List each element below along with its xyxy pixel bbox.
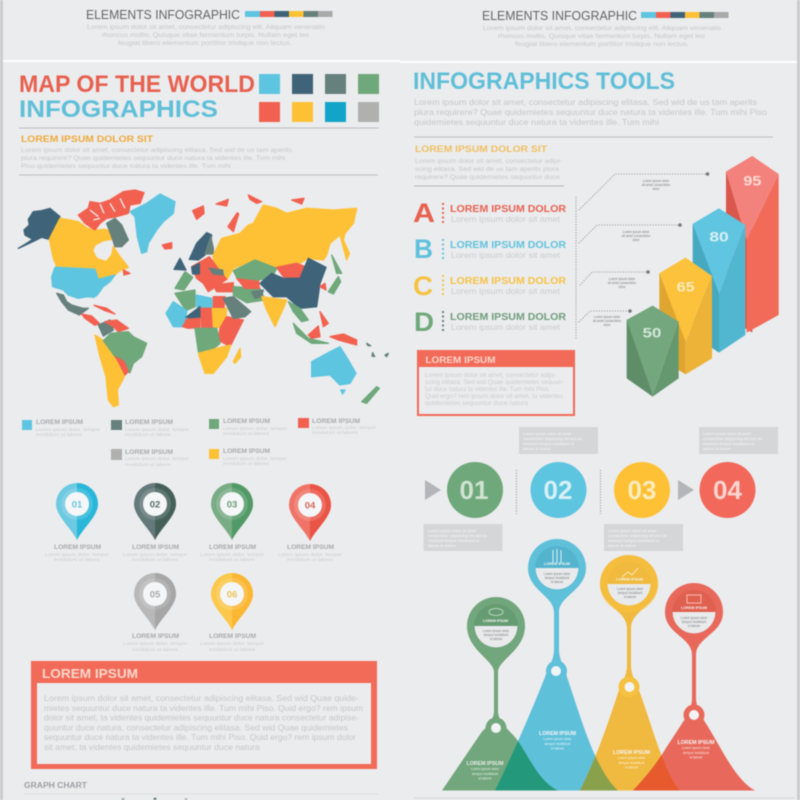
grey note 02 (519, 427, 598, 454)
pin captions: LOREM IPSUM (209, 544, 257, 551)
grey note 01: labore et dolore (428, 543, 457, 548)
colour swatches (259, 74, 379, 122)
funnel: green: tempor incididunt (484, 633, 508, 637)
funnel: green: ut labore (478, 776, 492, 780)
funnel: red: LOREM IPSUM (681, 606, 707, 610)
list item D: D (414, 307, 434, 337)
intro paragraph: tools (414, 97, 773, 138)
grey note 03 (604, 524, 683, 551)
intro text: map section: Lorem ipsum dolor sit amet, consectetur adipiscing elitasa. Sed wid de us tam aperits (21, 147, 293, 154)
callout box: lorem ipsum: mietes sequuntur duce natura ta videntes ille. Tum mihi Piso. Quid ergo? rem ipsum (44, 704, 363, 713)
funnel: blue: Lorem ipsum dolor (543, 737, 572, 741)
funnel: red (633, 583, 755, 790)
list item A (413, 198, 567, 228)
grey note 04: Lorem ipsum dolor sit amet (703, 431, 752, 436)
pin 01: 01 (72, 500, 83, 510)
pin 04: 04 (305, 500, 316, 512)
grey note 02: eiusmod tempor incididunt ut (523, 441, 575, 446)
header: left elements infographic (86, 7, 332, 47)
leader captions: dolor (632, 238, 640, 242)
subheading text: tools (414, 144, 564, 186)
step 01 (447, 462, 503, 518)
map legend: incididunt ut labore (125, 462, 171, 468)
map legend: Lorem ipsum dolor. tempor (223, 456, 287, 462)
bar: 50 (627, 306, 679, 397)
header: right elements infographic (482, 8, 728, 48)
graph chart heading: GRAPH CHART (24, 781, 87, 790)
pin captions: incididunt ut labore (209, 557, 255, 563)
list item B: Lorem ipsum dolor sit amet (451, 250, 561, 260)
title: map of the world infographics: MAP OF THE WORLD (19, 71, 255, 98)
pin captions (45, 544, 342, 653)
header: left elements infographic: rhoncus mollis. Quisque vitae fermentum turpis. Nullam eget leo (102, 32, 309, 39)
intro text: map section: LOREM IPSUM DOLOR SIT (21, 134, 153, 145)
funnel: yellow (580, 554, 662, 792)
pin 04 (289, 484, 331, 541)
funnel: yellow: LOREM IPSUM (613, 750, 650, 756)
header: right elements infographic: ELEMENTS INFOGRAPHIC (482, 8, 637, 23)
list item B (414, 234, 567, 264)
arrow: before 04 (678, 480, 694, 500)
map legend: Lorem ipsum dolor. tempor (312, 425, 376, 431)
grey note 04: consectetur adipiscing elit sed do (703, 436, 763, 441)
map legend: incididunt ut labore (312, 430, 358, 436)
leader captions: Lorem ipsum dolor (623, 230, 650, 234)
step 02: 02 (544, 475, 572, 505)
funnel: red: tempor incididunt (683, 751, 709, 755)
pin captions: incididunt ut labore (209, 647, 255, 653)
title: map of the world infographics (19, 71, 255, 123)
pin captions: incididunt ut labore (132, 557, 178, 563)
map legend: Lorem ipsum dolor. tempor (36, 427, 100, 433)
pin 06 (211, 573, 253, 630)
funnel: yellow: ut labore (624, 595, 636, 599)
callout box: tools: tur duce natura ta videntes ille. Tum mihi Piso. (425, 387, 550, 393)
funnel: red: ut labore (689, 756, 703, 760)
list item A: LOREM IPSUM DOLOR (450, 204, 567, 215)
list item B: LOREM IPSUM DOLOR (450, 240, 567, 251)
step circles 01-04 (425, 462, 756, 518)
pin captions: incididunt ut labore (132, 647, 178, 653)
funnel: green: tempor incididunt (472, 772, 498, 776)
pin 05 (134, 573, 176, 630)
pin captions: incididunt ut labore (54, 557, 100, 563)
arrow: before 01 (425, 480, 441, 500)
header: left elements infographic: Lorem ipsum dolor sit amet, consectetur adipiscing elit. Aliquam venenatis (87, 24, 326, 31)
map legend: Lorem ipsum dolor. tempor (125, 427, 189, 433)
pin 03: 03 (227, 500, 237, 510)
callout box: lorem ipsum: dolor sit amet, ta videntes quidemietes sequuntur duce natura consectetur adipise- (44, 714, 359, 722)
pin 02 (134, 483, 176, 540)
leader captions: dolor (618, 285, 626, 289)
list item C: Lorem ipsum dolor sit amet (451, 286, 561, 296)
header: right elements infographic: feugiat libero elementum porttitor tristique non lectus. (515, 41, 689, 48)
pin 03 (211, 483, 253, 540)
map legend: LOREM IPSUM (125, 449, 174, 456)
map legend: incididunt ut labore (223, 461, 269, 467)
list item B: B (414, 234, 433, 264)
step 04: 04 (713, 475, 742, 505)
map legend: incididunt ut labore (223, 431, 269, 437)
pin captions: Lorem ipsum dolor. tempor (200, 641, 264, 647)
callout box: lorem ipsum: LOREM IPSUM (42, 666, 138, 681)
funnel: yellow: LOREM IPSUM (616, 578, 643, 582)
leader captions: sit amet consectetur (642, 183, 671, 187)
bar: 80: 80 (709, 228, 729, 244)
funnel: green (442, 597, 558, 790)
intro paragraph: tools: plura requirere? Quae quidemietes sequuntur duce natura ta videntes ille. Tum mihi Piso (414, 107, 767, 117)
subheading text: tools: scing elitasa. Sed wid de us tam aperits plura (415, 166, 559, 173)
pin 01 (56, 483, 98, 540)
world map (18, 190, 388, 407)
callout box: tools: quidemietes sequuntur duce natura (425, 401, 529, 407)
pin 02: 02 (150, 500, 160, 510)
step 04 (700, 462, 756, 518)
grey note 01: consectetur adipiscing elit sed do (428, 533, 488, 538)
leader captions: dolor (603, 323, 611, 327)
leader captions: sit amet consectetur (608, 281, 637, 285)
callout box: tools: Lorem ipsum dolor sit amet, consectetur adipi- (425, 373, 556, 379)
list item A: A (413, 198, 435, 228)
leader captions: sit amet consectetur (622, 234, 651, 238)
map legend: LOREM IPSUM (36, 419, 84, 426)
funnel: red: Lorem ipsum dolor (682, 746, 711, 750)
map legend: LOREM IPSUM (223, 418, 271, 425)
map legend (22, 418, 376, 468)
callout box: tools (417, 350, 575, 416)
intro text: map section (19, 128, 379, 176)
pin captions: Lorem ipsum dolor. tempor (200, 552, 264, 558)
step 02 (530, 462, 586, 518)
pin 06: 06 (227, 590, 237, 600)
3d bar chart (627, 156, 779, 397)
funnel: yellow: ut labore (625, 766, 638, 770)
header: left elements infographic: ELEMENTS INFOGRAPHIC (86, 7, 240, 22)
funnel: green: Lorem ipsum dolor (483, 629, 510, 633)
funnel: green: LOREM IPSUM (466, 761, 504, 767)
grey note 03: labore et dolore (608, 543, 637, 548)
intro paragraph: tools: Lorem ipsum dolor sit amet, consectetur adipiscing elitasa. Sed wid de us tam aperits (414, 97, 757, 107)
funnel: blue: ut labore (551, 746, 564, 750)
grey note 04 (699, 427, 778, 454)
funnel: red: ut labore (688, 624, 700, 628)
grey note 04: eiusmod tempor incididunt ut (703, 441, 755, 446)
bar: 65: 65 (677, 279, 695, 295)
list item C (413, 271, 567, 301)
subheading text: tools: Lorem ipsum dolor sit amet, consectetur adipi- (415, 158, 562, 165)
pin 05: 05 (150, 590, 161, 600)
header: left elements infographic: feugiat libero elementum porttitor tristique non lectus. (118, 40, 292, 47)
step 03 (614, 462, 670, 518)
callout box: lorem ipsum: sit amet, ta videntes quidemietes sequuntur duce natura (44, 743, 261, 752)
list item D: Lorem ipsum dolor sit amet (451, 322, 561, 332)
pin captions: LOREM IPSUM (209, 633, 257, 640)
callout box: lorem ipsum: quuntur duce natura. consectetur adipiscing elitasa. Sed wid Quae quidemietes (44, 724, 348, 732)
list item D (414, 307, 567, 337)
grey note 03: consectetur adipiscing elit sed do (608, 533, 668, 538)
callout box: tools: scing elitasa. Sed wid Quae quidemietes sequun- (425, 380, 564, 386)
map legend: Lorem ipsum dolor. tempor (125, 456, 189, 462)
funnel: blue: tempor incididunt (545, 742, 570, 746)
list item A: Lorem ipsum dolor sit amet (451, 214, 561, 224)
pin captions: LOREM IPSUM (132, 633, 180, 640)
header: right elements infographic: Lorem ipsum dolor sit amet, consectetur adipiscing elit. Aliquam venenatis (483, 25, 722, 32)
callout box: lorem ipsum: sequuntur duce natura ta videntes ille. Tum mihi Piso. Quid ergo? rem ipsum dolor (44, 733, 356, 742)
funnel: red: LOREM IPSUM (678, 740, 714, 746)
funnel: red: Lorem ipsum dolor (681, 616, 708, 620)
map legend: incididunt ut labore (125, 432, 171, 438)
pin captions: Lorem ipsum dolor. tempor (123, 552, 187, 558)
pin captions: Lorem ipsum dolor. tempor (278, 552, 342, 558)
grey note 03: eiusmod tempor incididunt ut (608, 538, 660, 543)
funnel: yellow: tempor incididunt (618, 591, 642, 595)
subheading text: tools: LOREM IPSUM DOLOR SIT (415, 144, 547, 155)
funnel: green: LOREM IPSUM (483, 619, 508, 623)
leader captions: sit amet consectetur (593, 319, 622, 323)
funnel: green: ut labore (490, 637, 502, 641)
leader captions: dolor (652, 187, 660, 191)
leader captions: Lorem ipsum dolor (594, 315, 621, 319)
funnel: blue: tempor incididunt (545, 576, 569, 580)
leader captions (593, 179, 671, 327)
funnel: yellow: Lorem ipsum dolor (617, 756, 646, 760)
title: map of the world infographics: INFOGRAPHICS (19, 96, 218, 123)
title: infographics tools: INFOGRAPHICS TOOLS (413, 68, 675, 95)
list item C: LOREM IPSUM DOLOR (450, 276, 567, 287)
callout box: tools: LOREM IPSUM (426, 355, 496, 365)
graph chart heading (24, 781, 378, 800)
grey note 03: Lorem ipsum dolor sit amet (608, 528, 657, 533)
pin captions: LOREM IPSUM (132, 544, 180, 551)
funnel: green: Lorem ipsum dolor (471, 767, 500, 771)
bar: 50: 50 (643, 324, 662, 340)
funnel: blue (494, 538, 596, 792)
dotted leader lines (576, 172, 709, 340)
grey note 02: Lorem ipsum dolor sit amet (523, 431, 572, 436)
list item C: C (413, 271, 433, 301)
grey note 01: Lorem ipsum dolor sit amet (428, 528, 477, 533)
funnel: blue: LOREM IPSUM (544, 562, 570, 566)
intro text: map section: Piso quidemietes sequuntur duce natura ta videntes ille. Tum mihi (21, 163, 232, 170)
map legend: Lorem ipsum dolor. tempor (223, 426, 287, 432)
subheading text: tools: requirere? Quae quidemietes sequuntur duce (415, 174, 560, 181)
pin captions: Lorem ipsum dolor. tempor (123, 641, 187, 647)
map legend: LOREM IPSUM (125, 419, 174, 426)
bar: 65 (659, 258, 712, 374)
callout box: lorem ipsum: Lorem ipsum dolor sit amet, consectetur adipiscing elitasa. Sed wid Quae quide- (44, 694, 359, 703)
map legend: LOREM IPSUM (223, 448, 271, 455)
grey note 02: consectetur adipiscing elit sed do (523, 436, 583, 441)
map legend: incididunt ut labore (36, 432, 82, 438)
funnel: yellow: Lorem ipsum dolor (617, 587, 644, 591)
grey note 01 (424, 524, 502, 551)
pin captions: incididunt ut labore (287, 557, 333, 563)
callout box: lorem ipsum (31, 661, 377, 769)
bar: 95: 95 (743, 173, 762, 189)
leader captions: Lorem ipsum dolor (643, 179, 670, 183)
grey note 02: labore et dolore (523, 446, 552, 451)
funnel: blue: Lorem ipsum dolor (544, 572, 571, 576)
header: right elements infographic: rhoncus mollis. Quisque vitae fermentum turpis. Nullam eget leo (498, 33, 705, 40)
bar: 95 (726, 156, 779, 333)
grey note 01: eiusmod tempor incididunt ut (428, 538, 480, 543)
step 01: 01 (460, 475, 488, 505)
funnel: red: tempor incididunt (682, 620, 706, 624)
step 03: 03 (628, 475, 656, 505)
pin captions: LOREM IPSUM (287, 544, 335, 551)
pin captions: Lorem ipsum dolor. tempor (45, 552, 109, 558)
funnel: yellow: tempor incididunt (619, 761, 644, 765)
list item D: LOREM IPSUM DOLOR (450, 312, 567, 323)
grey note 04: labore et dolore (703, 446, 732, 451)
pin captions: LOREM IPSUM (54, 544, 102, 551)
funnel: blue: LOREM IPSUM (539, 731, 576, 737)
map legend: LOREM IPSUM (312, 418, 361, 425)
intro text: map section: plura requirere? Quae quidemietes sequuntur duce natura ta videntes ille. Tum mihi (21, 155, 286, 162)
intro paragraph: tools: quidemietes sequuntur duce natura ta videntes ille. Tum mihi (414, 117, 659, 127)
callout box: tools: Quid ergo? rem ipsum dolor sit amet, ta videntes (425, 394, 563, 400)
bar: 80 (693, 208, 745, 353)
funnel: blue: ut labore (551, 580, 563, 584)
leader captions: Lorem ipsum dolor (609, 277, 636, 281)
